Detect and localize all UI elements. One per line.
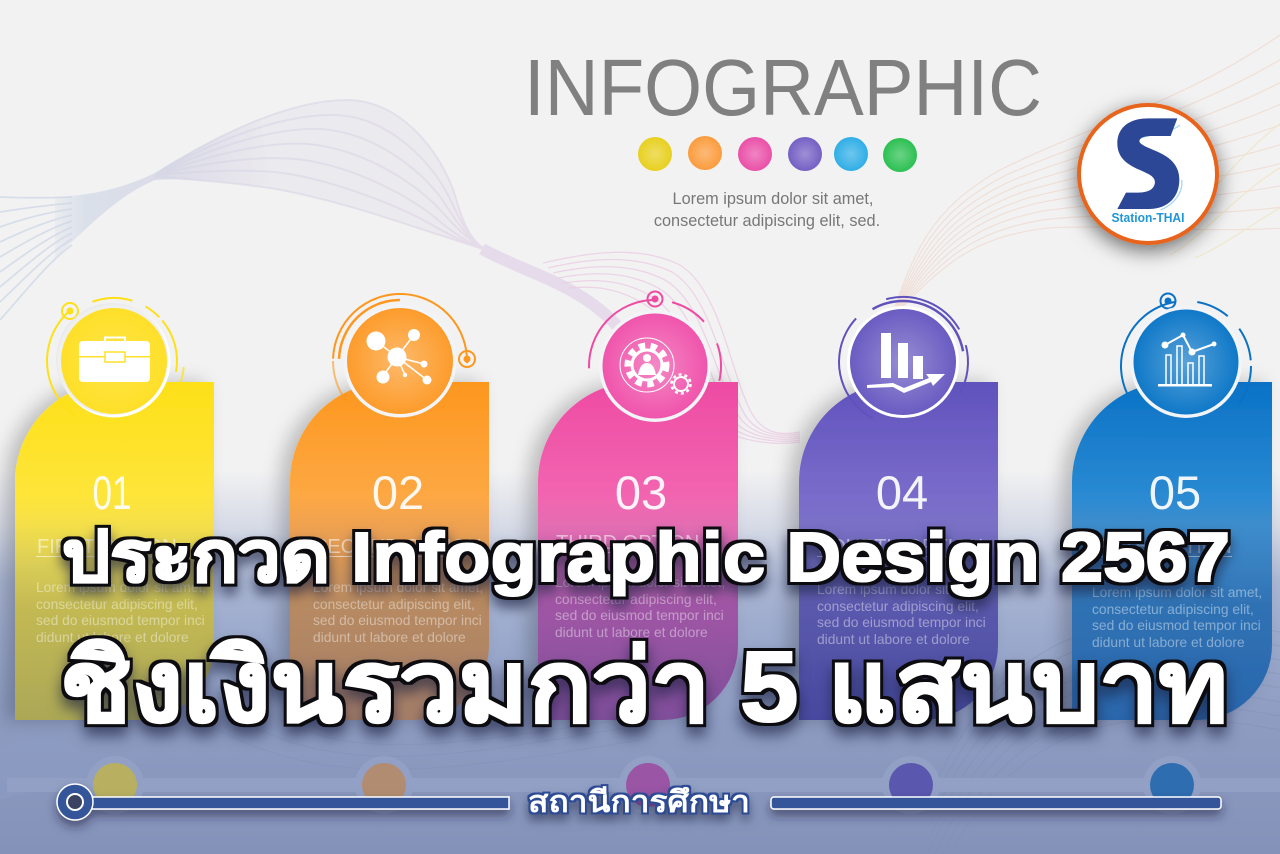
icon badge 5: line and bar chart xyxy=(1095,275,1277,457)
subtitle: สถานีการศึกษา: สถานีการศึกษา xyxy=(528,786,750,819)
logo wordmark: Station-THAI xyxy=(1112,210,1184,225)
body text 4: consectetur adipiscing elit, xyxy=(817,599,979,614)
timeline dot 4 xyxy=(882,756,940,814)
number 04: 04 xyxy=(876,466,928,519)
body text 2: Lorem ipsum dolor sit amet, xyxy=(313,580,483,595)
intro text xyxy=(654,190,880,230)
option label 4: FOURTH OPTION xyxy=(818,536,983,558)
body text 4: didunt ut labore et dolore xyxy=(817,632,970,647)
colour dots xyxy=(638,136,917,172)
timeline band xyxy=(7,778,1280,792)
body text 1: Lorem ipsum dolor sit amet, xyxy=(36,580,206,595)
timeline dot 2 xyxy=(355,756,413,814)
body text 2 xyxy=(313,580,483,645)
body text 4: Lorem ipsum dolor sit amet, xyxy=(817,582,987,597)
gears glyph xyxy=(620,338,690,394)
intro text: consectetur adipiscing elit, sed. xyxy=(654,212,880,230)
number 05: 05 xyxy=(1149,466,1201,519)
body text 3 xyxy=(555,575,725,640)
body text 2: didunt ut labore et dolore xyxy=(313,630,466,645)
left rule with node xyxy=(57,784,509,820)
body text 1 xyxy=(36,580,206,645)
headline line 2: ชิงเงินรวมกว่า 5 แสนบาท xyxy=(60,631,1228,743)
body text 5: didunt ut labore et dolore xyxy=(1092,635,1245,650)
body text 3: sed do eiusmod tempor inci xyxy=(555,608,724,623)
icon badge 1: briefcase xyxy=(21,268,207,454)
number 01: 01 xyxy=(92,466,132,519)
body text 4: sed do eiusmod tempor inci xyxy=(817,615,986,630)
chart glyph xyxy=(1158,332,1216,386)
panel: card 2 xyxy=(290,382,489,720)
briefcase glyph xyxy=(79,338,150,382)
timeline dot 3 xyxy=(619,756,677,814)
panel: card 1 xyxy=(15,382,214,720)
network glyph xyxy=(366,329,432,384)
body text 1: sed do eiusmod tempor inci xyxy=(36,613,205,628)
timeline dot 5 xyxy=(1143,756,1201,814)
body text 2: sed do eiusmod tempor inci xyxy=(313,613,482,628)
headline line 1: ประกวด Infographic Design 2567 xyxy=(62,518,1230,596)
intro text: Lorem ipsum dolor sit amet, xyxy=(673,190,873,208)
body text 2: consectetur adipiscing elit, xyxy=(313,597,475,612)
body text 3: consectetur adipiscing elit, xyxy=(555,592,717,607)
option label 1: FIRST OPTION xyxy=(37,536,177,558)
icon badge 2: network xyxy=(306,267,494,455)
panel: card 5 xyxy=(1072,382,1272,720)
body text 3: Lorem ipsum dolor sit amet, xyxy=(555,575,725,590)
number 03: 03 xyxy=(615,466,667,519)
icon badge 4: bar chart with arrow xyxy=(816,275,990,449)
bar chart glyph xyxy=(867,333,945,393)
icon badge 3: gears xyxy=(570,281,740,451)
body text 5: sed do eiusmod tempor inci xyxy=(1092,618,1261,633)
body text 4 xyxy=(817,582,987,647)
right rule xyxy=(771,797,1221,809)
body text 5: consectetur adipiscing elit, xyxy=(1092,602,1254,617)
option label 2: SECOND OPTION xyxy=(314,536,482,558)
heading: INFOGRAPHIC: INFOGRAPHIC xyxy=(524,43,1042,132)
body text 5: Lorem ipsum dolor sit amet, xyxy=(1092,585,1262,600)
number 02: 02 xyxy=(372,466,424,519)
panel: card 4 xyxy=(799,382,998,720)
body text 3: didunt ut labore et dolore xyxy=(555,625,708,640)
panel: card 3 xyxy=(538,382,738,720)
timeline dot 1 xyxy=(86,756,144,814)
option label 5: FIFTH OPTION xyxy=(1093,536,1232,558)
body text 5 xyxy=(1092,585,1262,650)
body text 1: consectetur adipiscing elit, xyxy=(36,597,198,612)
logo: Station-THAI xyxy=(1079,105,1217,243)
option label 3: THIRD OPTION xyxy=(556,532,699,554)
body text 1: didunt ut labore et dolore xyxy=(36,630,189,645)
logo letter S xyxy=(1117,118,1182,210)
